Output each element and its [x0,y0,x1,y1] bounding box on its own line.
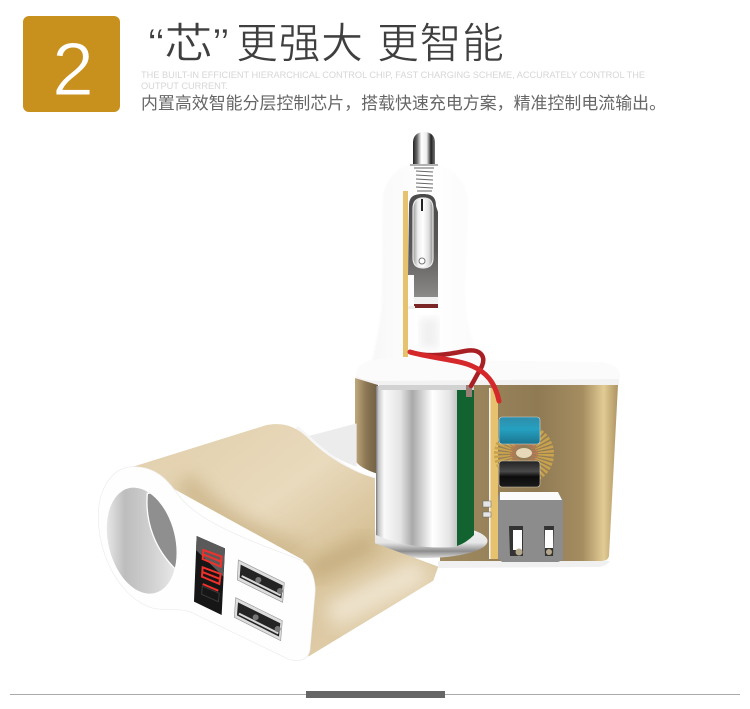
product: rear cutaway charger [355,132,620,568]
title [148,20,504,67]
title: 更智能 [377,20,504,67]
rear usb port [498,492,563,562]
product: front charger [98,417,450,663]
chinese description: 内置高效智能分层控制芯片，搭载快速充电方案，精准控制电流输出。 [141,94,666,113]
upper circuit board [403,191,408,357]
english subtitle: THE BUILT-IN EFFICIENT HIERARCHICAL CONTROL CHIP, FAST CHARGING SCHEME, ACCURATELY CONTROL THE [141,70,645,80]
white collar and cap of rear box [356,359,620,385]
metal cylinder [376,385,474,548]
metal contact [407,194,438,309]
lower circuit board [483,388,498,559]
title: 更强大 [236,20,363,67]
gold box interior [440,385,618,561]
gold housing [134,424,438,656]
bottom divider line [10,694,740,695]
black capacitor [499,461,540,487]
usb port lower [234,598,282,641]
rear white shadow panel [307,423,357,467]
english subtitle [141,70,645,91]
red wires [410,350,499,401]
english subtitle: OUTPUT CURRENT. [141,81,228,91]
usb port upper [237,560,284,602]
digital display [194,536,225,615]
clear plug shell [358,162,490,372]
plug tip [413,132,435,164]
socket opening [106,488,176,594]
teal capacitor [499,417,540,444]
bottom accent bar [306,691,445,698]
left gold edge [355,378,378,474]
number badge [23,16,120,112]
bottom white lip [438,561,610,568]
spring [410,165,438,191]
title: “芯” [148,20,229,67]
white front face [98,467,315,661]
number badge: 2 [52,27,94,111]
cylinder flange [362,524,488,558]
toroid coil [503,433,545,475]
